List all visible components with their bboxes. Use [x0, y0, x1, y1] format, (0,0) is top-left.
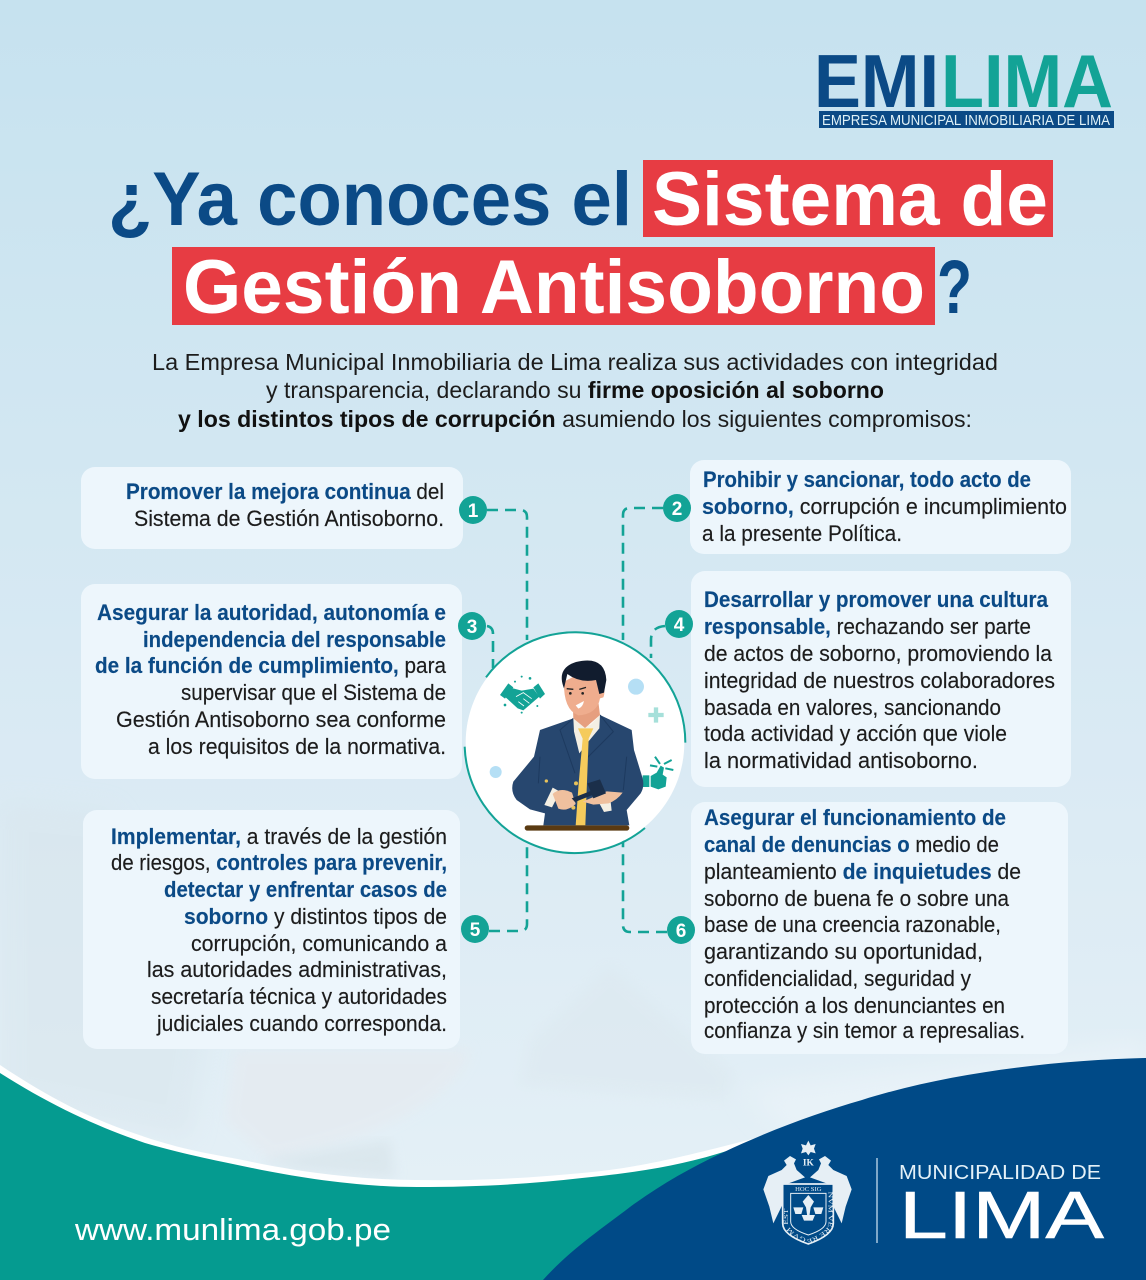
panel: commitment 3: a los requisitos de la normativa.	[148, 734, 446, 759]
emblem: shield	[783, 1184, 833, 1244]
icon: handshake	[500, 676, 545, 714]
panel: commitment 5: secretaría técnica y autoridades	[151, 984, 447, 1009]
panel: commitment 5: las autoridades administrativas,	[147, 957, 447, 982]
panel: commitment 6: base de una creencia razonable,	[704, 912, 1001, 937]
panel: commitment 4: responsable, rechazando ser parte	[704, 614, 1031, 639]
figure: neck	[573, 693, 600, 728]
figure: facial features	[567, 687, 586, 709]
panel: commitment 2: Prohibir y sancionar, todo acto de	[703, 467, 1031, 492]
website: www.munlima.gob.pe	[74, 1212, 391, 1247]
coat of arms of Lima	[763, 1140, 852, 1245]
panel: commitment 2: a la presente Política.	[702, 521, 902, 546]
figure: shirt	[573, 715, 600, 753]
figure: tie	[576, 728, 593, 825]
bottom wave: white band	[0, 1065, 760, 1280]
coat of arms of Lima: NVM VERE REGVM EST	[784, 1192, 832, 1243]
panel: commitment 3: Asegurar la autoridad, autonomía e	[97, 600, 446, 625]
panel: commitment 6: confidencialidad, seguridad y	[704, 966, 971, 991]
title: Gestión Antisoborno	[183, 245, 925, 330]
emblem: right eagle	[810, 1156, 852, 1223]
number badge 5: 5	[470, 920, 481, 941]
intro text	[152, 349, 998, 432]
EMILIMA logo: LIMA	[941, 39, 1113, 123]
number badge 5	[461, 915, 489, 943]
panel: commitment 6: garantizando su oportunidad,	[704, 939, 983, 964]
panel: commitment 2: soborno, corrupción e incumplimiento	[702, 494, 1067, 519]
dashed connectors	[487, 508, 667, 932]
panel: commitment 6	[691, 802, 1068, 1054]
number badge 1: 1	[468, 501, 479, 522]
panel: commitment 4: basada en valores, sancionando	[704, 695, 1001, 720]
bottom wave: teal band	[0, 1073, 730, 1280]
number badge 3: 3	[467, 617, 477, 638]
figure: left fist	[553, 790, 576, 810]
panel: commitment 4: Desarrollar y promover una cultura	[704, 587, 1049, 612]
icon: thumbs up	[643, 757, 673, 789]
panel: commitment 3: independencia del responsable	[143, 627, 446, 652]
panel: commitment 2	[690, 460, 1071, 554]
EMILIMA logo: EMPRESA MUNICIPAL INMOBILIARIA DE LIMA	[822, 112, 1110, 129]
intro text: La Empresa Municipal Inmobiliaria de Lima realiza sus actividades con integridad	[152, 349, 998, 375]
panel: commitment 1	[81, 467, 463, 549]
emblem: initials: IK	[803, 1158, 815, 1168]
Municipalidad de Lima wordmark: LIMA	[899, 1178, 1104, 1253]
panel: commitment 6: soborno de buena fe o sobre una	[704, 886, 1010, 911]
number badge 4	[665, 610, 693, 638]
panel: commitment 6: canal de denuncias o medio de	[704, 832, 999, 857]
panel: commitment 5: judiciales cuando corresponda.	[156, 1011, 447, 1036]
Municipalidad de Lima wordmark	[899, 1162, 1104, 1253]
panel: commitment 6: Asegurar el funcionamiento de	[704, 805, 1006, 830]
panel: commitment 1: Promover la mejora continua del	[126, 479, 444, 504]
panel: commitment 3: supervisar que el Sistema de	[181, 680, 446, 705]
Municipalidad de Lima wordmark: MUNICIPALIDAD DE	[899, 1162, 1101, 1184]
number badge 6	[667, 916, 695, 944]
figure	[512, 660, 643, 825]
intro text: y los distintos tipos de corrupción asumiendo los siguientes compromisos:	[178, 406, 972, 432]
emblem: motto: HOC SIG	[795, 1186, 822, 1193]
panel: commitment 5: de riesgos, controles para prevenir,	[111, 850, 447, 875]
panel: commitment 5: Implementar, a través de la gestión	[111, 824, 447, 849]
panel: commitment 4: la normatividad antisoborno.	[704, 748, 978, 773]
title	[108, 157, 1053, 330]
divider	[876, 1158, 878, 1243]
panel: commitment 4	[691, 571, 1071, 787]
background photo: faint hands and banknotes	[0, 800, 1146, 1178]
EMILIMA logo	[814, 39, 1114, 129]
EMILIMA logo: EMI	[814, 39, 939, 123]
panel: commitment 3: Gestión Antisoborno sea conforme	[116, 707, 446, 732]
number badge 1	[459, 496, 487, 524]
panel: commitment 4: toda actividad y acción que viole	[704, 721, 1007, 746]
panel: commitment 6: confianza y sin temor a represalias.	[704, 1018, 1025, 1043]
panel: commitment 5: detectar y enfrentar casos de	[164, 877, 447, 902]
figure: cuffs	[544, 788, 612, 812]
figure: buttons	[545, 779, 578, 810]
title: ?	[937, 245, 972, 330]
panel: commitment 3	[81, 584, 462, 779]
figure: right open hand	[583, 791, 623, 805]
panel: commitment 6: planteamiento de inquietudes de	[704, 859, 1021, 884]
panel: commitment 6: protección a los denunciantes en	[704, 993, 1005, 1018]
number badge 2: 2	[672, 499, 682, 520]
panel: commitment 1: Sistema de Gestión Antisoborno.	[134, 506, 444, 531]
emblem: crowns and star	[793, 1195, 823, 1221]
panel: commitment 5	[83, 810, 460, 1049]
figure: face	[564, 670, 604, 715]
number badge 4: 4	[674, 615, 685, 636]
intro text: y transparencia, declarando su firme oposición al soborno	[266, 377, 884, 403]
central illustration: lawyer with gavel	[465, 632, 685, 853]
title: Sistema de	[652, 157, 1048, 242]
figure: suit	[512, 715, 643, 825]
number badge 6: 6	[676, 921, 686, 942]
panel: commitment 5: soborno y distintos tipos de	[184, 904, 447, 929]
figure: hair	[562, 660, 606, 694]
panel: commitment 5: corrupción, comunicando a	[191, 931, 448, 956]
number badge 3	[458, 612, 486, 640]
emblem: left eagle	[763, 1156, 805, 1223]
panel: commitment 4: de actos de soborno, promoviendo la	[704, 641, 1053, 666]
figure: gavel	[572, 779, 606, 802]
icon: blue dots and plus	[490, 679, 664, 778]
desk	[525, 825, 629, 831]
emblem: star	[801, 1141, 816, 1155]
panel: commitment 4: integridad de nuestros colaboradores	[704, 668, 1055, 693]
bottom wave: blue band	[543, 1058, 1146, 1280]
figure: lapels	[538, 715, 627, 790]
panel: commitment 3: de la función de cumplimiento, para	[95, 653, 447, 678]
number badge 2	[663, 494, 691, 522]
title: ¿Ya conoces el	[108, 157, 632, 242]
